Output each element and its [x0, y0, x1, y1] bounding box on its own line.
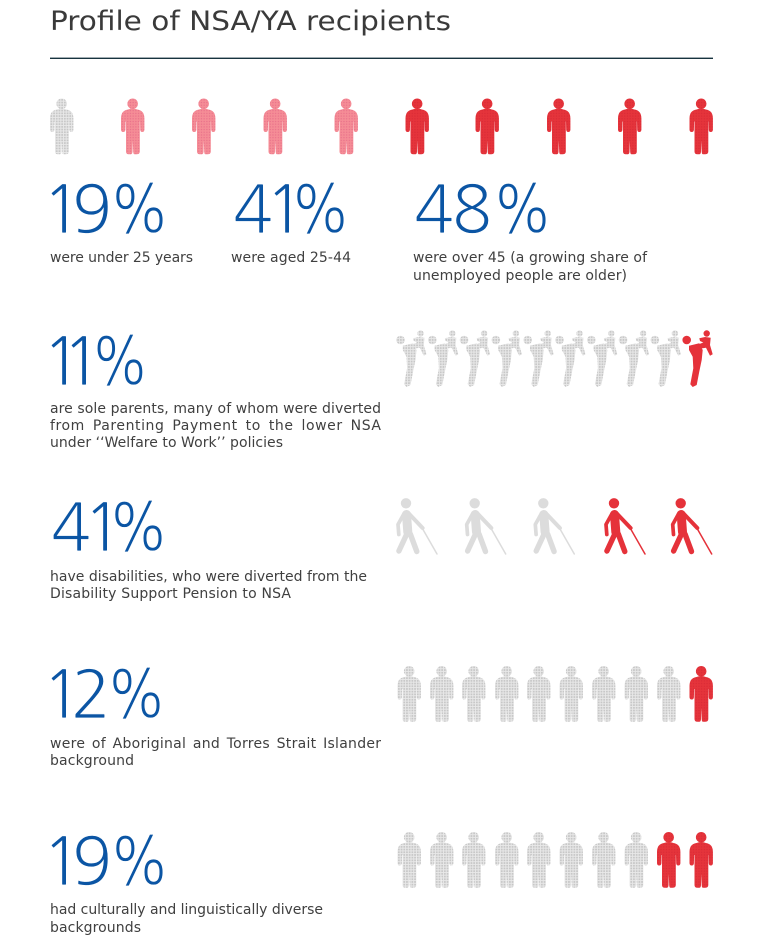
- stat: sole parents: [42, 329, 381, 451]
- stat: disabilities: Disability Support Pension to NSA: [50, 586, 291, 602]
- stat: over 45: 4: [414, 177, 454, 243]
- stat: under 25: were under 25 years: [50, 250, 193, 266]
- stat: over 45: 8: [452, 177, 492, 243]
- stat: sole parents: 1: [62, 329, 102, 395]
- stat: under 25: 9: [72, 177, 112, 243]
- stat: aged 25-44: 4: [233, 177, 273, 243]
- pictogram: parent lifting child: [396, 330, 713, 387]
- stat: disabilities: %: [108, 495, 169, 561]
- pictogram: person with cane: [398, 499, 712, 554]
- stat: disabilities: have disabilities, who were diverted from the: [50, 569, 367, 585]
- panel: age pictogram row: [50, 98, 713, 154]
- stat: under 25: [42, 177, 193, 266]
- stat: Aboriginal and Torres Strait Islander: background: [50, 753, 134, 769]
- stat: sole parents: 1: [42, 329, 82, 395]
- stat: disabilities: [50, 495, 367, 602]
- stat: aged 25-44: %: [290, 177, 351, 243]
- stat: aged 25-44: were aged 25-44: [231, 250, 351, 266]
- stat: aged 25-44: [231, 177, 351, 266]
- pictogram: two in ten people: [398, 832, 713, 888]
- pictogram: one in ten people: [398, 666, 713, 722]
- stat: sole parents: %: [90, 329, 150, 395]
- stat: Aboriginal and Torres Strait Islander: %: [106, 662, 167, 728]
- stat: Aboriginal and Torres Strait Islander: 2: [71, 662, 111, 728]
- stat: sole parents: under ‘‘Welfare to Work’’ policies: [50, 435, 283, 451]
- stat: over 45: [413, 177, 648, 284]
- stat: disabilities: 4: [51, 495, 91, 561]
- stat: culturally and linguistically diverse: [42, 829, 323, 936]
- stat: Aboriginal and Torres Strait Islander: [42, 662, 381, 769]
- stat: culturally and linguistically diverse: had culturally and linguistically diverse: [50, 902, 323, 918]
- stat: culturally and linguistically diverse: %: [109, 829, 170, 895]
- title: Profile of NSA/YA recipients: [50, 6, 451, 37]
- stat: over 45: unemployed people are older): [413, 268, 627, 284]
- stat: under 25: 1: [42, 177, 82, 243]
- stat: Aboriginal and Torres Strait Islander: 1: [42, 662, 82, 728]
- stat: aged 25-44: 1: [265, 177, 305, 243]
- stat: Aboriginal and Torres Strait Islander: were of Aboriginal and Torres Strait Islander: [50, 736, 381, 752]
- stat: disabilities: 1: [83, 495, 123, 561]
- stat: culturally and linguistically diverse: 9: [72, 829, 112, 895]
- stat: over 45: %: [492, 177, 553, 243]
- stat: under 25: %: [109, 177, 170, 243]
- stat: culturally and linguistically diverse: backgrounds: [50, 920, 141, 936]
- stat: over 45: were over 45 (a growing share of: [413, 250, 648, 266]
- stat: culturally and linguistically diverse: 1: [42, 829, 82, 895]
- stat: sole parents: from Parenting Payment to the lower NSA: [50, 418, 381, 434]
- stat: sole parents: are sole parents, many of whom were diverted: [50, 401, 381, 417]
